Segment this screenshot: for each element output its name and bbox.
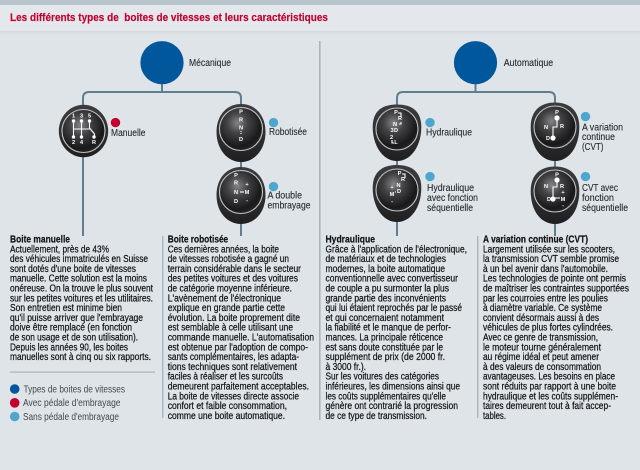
label: CVT séquentielle (581, 172, 628, 214)
legend: Sans pédale d'embrayage (23, 412, 119, 423)
text block: hydraulique: mances. La principale réticence (326, 332, 443, 344)
label: double embrayage: A double (268, 190, 302, 202)
text block: boite robotisée: tions techniques sont relativement (168, 362, 297, 373)
gear knob: CVT séquentielle: M (561, 197, 566, 203)
legend: Types de boites de vitesses (24, 384, 125, 396)
text block: boite manuelle: manuelle. Cette solution est la moins (10, 274, 147, 285)
gear knob: CVT séquentielle: P (555, 172, 559, 178)
text block: hydraulique: conventionnelle avec convertisseur (326, 274, 459, 285)
text block: boite robotisée: comme une boite automatique. (168, 411, 285, 422)
label: double embrayage: embrayage (268, 200, 311, 212)
gear knob: CVT séquentielle (531, 166, 579, 224)
text block: boite manuelle: manuelles sont à cinq ou six rapports. (10, 352, 151, 363)
gear knob: variation continue: R (560, 124, 564, 130)
text block: boite manuelle: qu'il puisse arriver que l'embrayage (10, 313, 143, 324)
gear knob: robotisée: R (239, 118, 243, 124)
text block: boite robotisée: de vitesses robotisée a gagné un (168, 254, 289, 265)
text block: boite manuelle: Boite manuelle (10, 234, 70, 246)
text block: variation continue: Avec ce genre de transmission, (483, 332, 598, 344)
label: CVT séquentielle: CVT avec (582, 183, 618, 194)
title: Les différents types de boites de vitesses et leurs caractéristiques (10, 12, 328, 24)
label: manuelle (111, 118, 146, 139)
text block: boite robotisée: faciles à réaliser et les surcoûts (168, 372, 283, 383)
text block: boite manuelle: de son usage et de son utilisation). (10, 332, 138, 344)
label: hydraulique séquentielle: séquentielle (427, 203, 473, 214)
label: variation continue: A variation (582, 122, 623, 134)
text block: variation continue: Largement utilisée sur les scooters, (483, 244, 615, 255)
gear knob: hydraulique séquentielle (373, 165, 421, 222)
text block: boite robotisée: commande manuelle. L'automatisation (168, 332, 314, 344)
text block: hydraulique: à 3000 fr.). (326, 362, 366, 373)
text block: boite robotisée: est semblable à celle utilisant une (168, 323, 293, 334)
gear knob: CVT séquentielle: - (562, 203, 564, 209)
gear knob: hydraulique: D (394, 128, 398, 134)
gear knob: CVT séquentielle: R (560, 184, 564, 190)
label: double embrayage (268, 182, 311, 212)
text block: boite manuelle (10, 234, 153, 363)
text block: variation continue: avantageuses. Les besoins en place (483, 372, 615, 383)
gear knob: manuelle (59, 105, 108, 157)
text block: boite manuelle: sont dotés d'une boite de vitesses (10, 264, 136, 275)
gear knob: hydraulique séquentielle: D (397, 189, 401, 195)
text block: variation continue: le moteur tourne généralement (483, 342, 601, 353)
text block: variation continue: à diamètre variable. Ce système (483, 303, 602, 314)
text block: hydraulique: de ce type de transmission. (326, 411, 427, 422)
gear knob: hydraulique séquentielle: P (398, 171, 402, 177)
text block: hydraulique: qui lui étaient reprochés par le passé (326, 303, 462, 314)
type node: automatique: Automatique (504, 58, 554, 69)
title band (0, 5, 640, 31)
text block: boite manuelle: Son entretien est minime bien (10, 303, 122, 314)
text block: boite robotisée: des petites voitures et des voitures (168, 274, 298, 285)
gear knob: double embrayage (216, 167, 266, 224)
text block: hydraulique: inférieures, les dimensions ainsi que (326, 382, 460, 392)
gear knob: hydraulique séquentielle: N (396, 183, 401, 189)
text block: hydraulique: la fiabilité et le manque de perfor- (326, 323, 451, 334)
gear knob: variation continue: N (544, 125, 548, 131)
text block: boite manuelle: doive être remplacé (en fonction (10, 323, 132, 334)
legend (10, 384, 125, 423)
gear knob: manuelle: 1 (72, 114, 75, 120)
gear knob: hydraulique séquentielle: - (391, 199, 393, 205)
text block: hydraulique: génère ont contrarié la progression (326, 401, 458, 412)
gear knob: CVT séquentielle: D (547, 197, 551, 203)
text block: variation continue: taires demeurent tout à fait accep- (483, 401, 611, 412)
text block: boite manuelle: Depuis les années 90, les boites (10, 342, 128, 353)
text block: variation continue: au régime idéal et peut amener (483, 352, 600, 363)
text block: variation continue: hydraulique et les coûts supplémen- (483, 391, 618, 402)
text block: hydraulique: supplément de prix (de 2000 fr. (326, 352, 445, 363)
gear knob: manuelle: R (92, 140, 96, 146)
legend: Avec pédale d'embrayage (23, 398, 121, 409)
text block: boite robotisée: demeurent parfaitement acceptables. (168, 382, 309, 392)
text block: variation continue: par les courroies entre les poulies (483, 293, 608, 304)
gear knob: hydraulique (373, 104, 421, 161)
text block: hydraulique: est sans doute constituée par le (326, 342, 443, 353)
text block: hydraulique: Sur les voitures des catégories (326, 372, 439, 383)
label: hydraulique séquentielle: Hydraulique (427, 183, 474, 194)
text block: boite robotisée: de catégorie moyenne inférieure. (168, 284, 292, 294)
type node: automatique (454, 41, 554, 84)
type node: mécanique (140, 41, 231, 84)
text block: hydraulique: de matériaux et de technologies (326, 254, 446, 265)
gear knob: hydraulique séquentielle: + (390, 185, 394, 191)
gear knob: robotisée: P (239, 110, 243, 116)
text block: variation continue: véhicules de plus fortes cylindrées. (483, 323, 613, 334)
gear knob: manuelle: 4 (80, 140, 84, 146)
text block: hydraulique: Hydraulique (326, 234, 375, 246)
gear knob: double embrayage: M (245, 190, 250, 196)
text block: variation continue: à un bel avenir dans l'automobile. (483, 264, 608, 275)
text block: variation continue: sont réduits par rapport à une boite (483, 382, 616, 392)
gear knob: double embrayage: N (234, 190, 238, 196)
gear knob: hydraulique: 2 (390, 135, 393, 141)
label: variation continue: (CVT) (582, 142, 604, 153)
text block: variation continue (483, 234, 629, 422)
gear knob: hydraulique: L (394, 140, 398, 146)
gear knob: double embrayage: - (246, 198, 248, 204)
label: robotisée: Robotisée (269, 127, 307, 138)
gear knob: double embrayage: + (245, 182, 249, 188)
gear knob: variation continue: D (546, 136, 550, 142)
label: hydraulique (425, 118, 472, 138)
text block: boite robotisée: L'avènement de l'électronique (168, 293, 281, 304)
text block: boite manuelle: onéreuse. On la trouve le plus souvent (10, 284, 153, 294)
text block: boite robotisée (168, 234, 314, 422)
label: CVT séquentielle: séquentielle (582, 203, 628, 214)
text block: hydraulique: Grâce à l'application de l'électronique, (326, 244, 467, 255)
text block: boite robotisée: terrain considérable dans le secteur (168, 264, 302, 275)
label: variation continue: continue (582, 132, 615, 143)
text block: hydraulique (326, 234, 467, 422)
label: CVT séquentielle: fonction (582, 193, 614, 204)
text block: boite robotisée: explique en grande partie cette (168, 303, 285, 314)
gear knob: hydraulique séquentielle: R (401, 177, 405, 183)
gear knob: variation continue (531, 102, 579, 161)
text block: hydraulique: grande partie des inconvénients (326, 293, 446, 304)
text block: boite manuelle: Actuellement, près de 43% (10, 244, 109, 255)
gear knob: manuelle: 5 (88, 114, 91, 120)
type node: mécanique: Mécanique (189, 58, 231, 69)
gear knob: double embrayage: D (234, 199, 238, 205)
gear knob: hydraulique: 3 (390, 128, 394, 134)
text block: variation continue: à des valeurs de consommation (483, 362, 601, 373)
gear knob: robotisée (216, 104, 266, 162)
text block: boite manuelle: des véhicules immatriculés en Suisse (10, 254, 148, 265)
text block: boite robotisée: est obtenue par l'adoption de compo- (168, 342, 308, 353)
label: hydraulique: Hydraulique (426, 128, 472, 138)
label: hydraulique séquentielle: avec fonction (427, 193, 478, 204)
text block: boite robotisée: évolution. La boite proprement dite (168, 313, 300, 324)
text block: hydraulique: et qui concernaient notamment (326, 313, 444, 324)
text block: variation continue: tables. (483, 411, 506, 422)
label: robotisée (269, 118, 307, 138)
text block: hydraulique: modernes, la boite automatique (326, 264, 445, 275)
gear knob: variation continue: P (555, 110, 559, 116)
text block: hydraulique: les coûts supplémentaires qu'elle (326, 391, 446, 402)
text block: variation continue: A variation continue (CVT) (483, 234, 588, 246)
label: variation continue (581, 112, 623, 153)
label: manuelle: Manuelle (111, 128, 146, 139)
text block: boite robotisée: Ces dernières années, la boite (168, 244, 279, 255)
gear knob: hydraulique: R (398, 116, 402, 122)
label: hydraulique séquentielle (425, 172, 478, 214)
gear knob: manuelle: 3 (80, 114, 83, 120)
text block: boite manuelle: sur les petites voitures et les utilitaires. (10, 293, 153, 304)
gear knob: hydraulique: N (393, 122, 397, 128)
connectors: automatique (397, 84, 555, 236)
gear knob: double embrayage: P (234, 173, 238, 179)
gear knob: hydraulique: P (394, 110, 398, 116)
text block: boite robotisée: sants complémentaires, les adapta- (168, 352, 299, 363)
text block: hydraulique: de couple a pu surmonter la plus (326, 284, 449, 294)
gear knob: CVT séquentielle: + (561, 190, 565, 196)
connectors: mécanique (83, 84, 241, 236)
text block: variation continue: convient désormais aussi à des (483, 313, 599, 324)
gear knob: robotisée: N (239, 126, 243, 132)
text block: boite robotisée: Boite robotisée (168, 234, 229, 246)
gear knob: manuelle: 2 (72, 140, 75, 146)
text block: boite robotisée: confort et faible consommation, (168, 401, 287, 412)
gear knob: CVT séquentielle: N (544, 184, 548, 190)
text block: boite robotisée: La boite de vitesses directe associe (168, 391, 299, 402)
gear knob: robotisée: D (239, 137, 243, 143)
gear knob: double embrayage: R (234, 180, 238, 186)
gear knob: hydraulique séquentielle: M (390, 192, 395, 198)
